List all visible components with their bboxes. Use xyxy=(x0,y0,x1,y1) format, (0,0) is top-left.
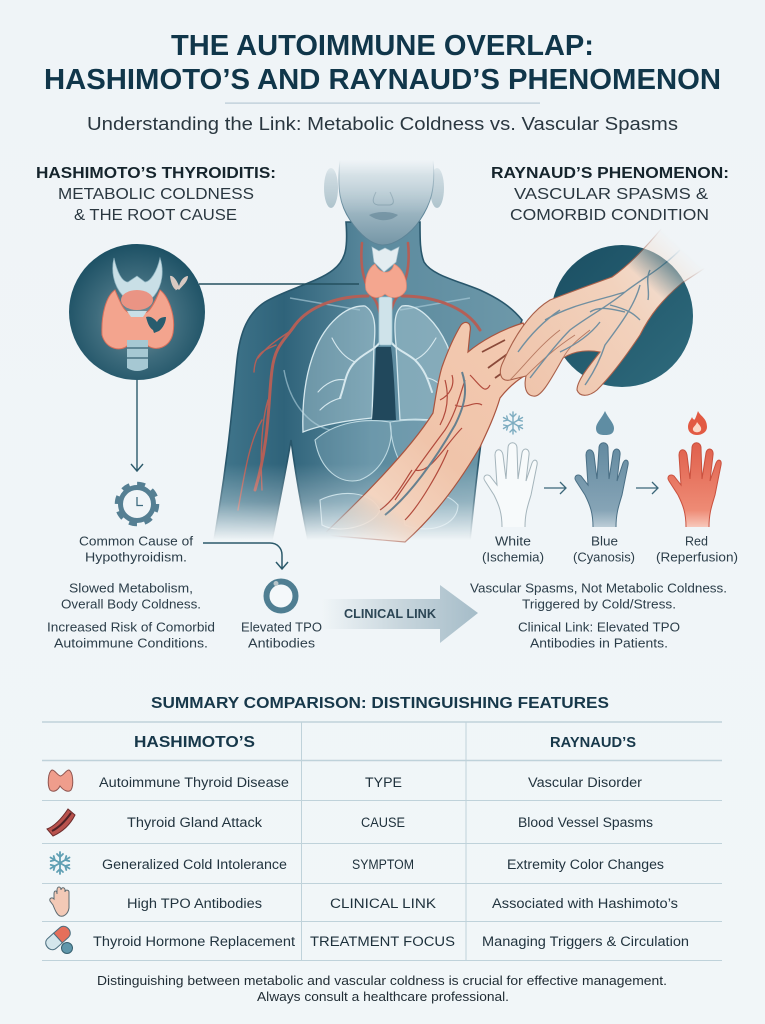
label: white: White xyxy=(495,534,531,548)
row: cause: CAUSE xyxy=(361,815,405,830)
hand: blue cyanosis xyxy=(575,443,628,527)
table header: RAYNAUD’S xyxy=(550,734,636,751)
row: cause xyxy=(127,815,653,830)
text: slowed metabolism: Overall Body Coldness. xyxy=(61,596,201,612)
table header xyxy=(134,734,636,751)
thyroid lobes xyxy=(102,290,174,349)
icon: flame xyxy=(688,411,707,435)
mediastinum xyxy=(372,347,396,420)
label: red: (Reperfusion) xyxy=(656,550,738,564)
title: HASHIMOTO’S AND RAYNAUD’S PHENOMENON xyxy=(44,64,721,96)
label: white xyxy=(482,534,544,564)
label: white: (Ischemia) xyxy=(482,550,544,564)
label: red xyxy=(656,534,738,564)
row: type: Vascular Disorder xyxy=(528,775,643,790)
teal butterfly xyxy=(146,317,166,333)
text: vascular spasms: Vascular Spasms, Not Metabolic Coldness. xyxy=(470,580,727,596)
text: elevated TPO: Elevated TPO xyxy=(241,620,322,634)
icon: gear clock xyxy=(117,484,157,524)
arrow: blue to red xyxy=(636,482,658,494)
title xyxy=(44,30,721,96)
row: clinical link: CLINICAL LINK xyxy=(330,896,436,911)
anatomical torso illustration xyxy=(214,160,522,540)
row: clinical link: High TPO Antibodies xyxy=(127,896,262,911)
label: red: Red xyxy=(685,534,708,548)
row: treatment focus xyxy=(93,934,689,949)
row: symptom: Extremity Color Changes xyxy=(507,857,664,872)
footer note: Always consult a healthcare professional. xyxy=(257,989,509,1004)
row: type: TYPE xyxy=(365,775,402,790)
arteries xyxy=(238,243,480,510)
text: clinical link: Clinical Link: Elevated TPO xyxy=(518,620,680,634)
footer note: Distinguishing between metabolic and vascular coldness is crucial for effective management. xyxy=(97,973,667,988)
text: comorbid risk xyxy=(47,620,215,650)
row: treatment focus: Thyroid Hormone Replacement xyxy=(93,934,295,949)
abdominal organs xyxy=(315,420,458,529)
row: symptom: Generalized Cold Intolerance xyxy=(102,857,287,872)
trachea rings xyxy=(127,340,148,371)
heading: Raynaud's phenomenon: VASCULAR SPASMS & xyxy=(514,186,708,203)
heading: Raynaud's phenomenon xyxy=(491,165,729,224)
lungs xyxy=(303,306,460,432)
row: cause: Thyroid Gland Attack xyxy=(127,815,262,830)
bronchi xyxy=(318,338,448,410)
icon: blood vessel xyxy=(47,809,75,836)
icon: snowflake xyxy=(504,412,522,434)
text: elevated TPO xyxy=(241,620,322,650)
heading: Hashimoto's thyroiditis: HASHIMOTO’S THYROIDITIS: xyxy=(36,165,276,182)
row: treatment focus: Managing Triggers & Circulation xyxy=(482,934,689,949)
text: common cause: Hypothyroidism. xyxy=(85,550,187,564)
label: blue xyxy=(573,534,635,564)
text: comorbid risk: Autoimmune Conditions. xyxy=(54,636,208,650)
heading: Hashimoto's thyroiditis xyxy=(36,165,276,224)
clinical link arrow xyxy=(322,585,478,643)
shoulder highlights xyxy=(284,298,470,430)
text: slowed metabolism: Slowed Metabolism, xyxy=(69,580,193,596)
clinical link arrow: CLINICAL LINK xyxy=(344,607,436,621)
icon: TPO antibody ring xyxy=(266,581,296,610)
table header: HASHIMOTO’S xyxy=(134,734,255,751)
finger separations xyxy=(510,330,590,380)
veins xyxy=(518,250,680,385)
label: blue: (Cyanosis) xyxy=(573,550,635,564)
heading: Hashimoto's thyroiditis: & THE ROOT CAUSE xyxy=(74,207,237,224)
icon: pill and tablet xyxy=(43,924,73,954)
summary heading: SUMMARY COMPARISON: DISTINGUISHING FEATURES xyxy=(151,695,609,712)
text: comorbid risk: Increased Risk of Comorbid xyxy=(47,620,215,634)
Raynaud circle xyxy=(551,245,693,387)
row: clinical link xyxy=(127,896,678,911)
text: common cause: Common Cause of xyxy=(79,534,193,548)
text: clinical link: Antibodies in Patients. xyxy=(530,636,668,650)
row: type: Autoimmune Thyroid Disease xyxy=(99,775,289,790)
larynx ring xyxy=(121,290,153,310)
text: elevated TPO: Antibodies xyxy=(248,636,316,650)
forearm with red arteries xyxy=(323,322,534,542)
row: cause: Blood Vessel Spasms xyxy=(518,815,653,830)
row: treatment focus: TREATMENT FOCUS xyxy=(310,934,455,949)
row: clinical link: Associated with Hashimoto’s xyxy=(492,896,678,911)
text: clinical link xyxy=(518,620,680,650)
subtitle: Understanding the Link: Metabolic Coldness vs. Vascular Spasms xyxy=(87,113,678,134)
icon: small snowflake xyxy=(50,852,70,874)
icon: water drop xyxy=(596,411,614,435)
torso silhouette xyxy=(214,222,522,540)
row: symptom: SYMPTOM xyxy=(352,857,414,872)
thyroid cartilage xyxy=(113,258,162,303)
text: common cause xyxy=(79,534,193,564)
heading: Hashimoto's thyroiditis: METABOLIC COLDNESS xyxy=(58,186,254,203)
row: symptom xyxy=(102,857,664,872)
title: THE AUTOIMMUNE OVERLAP: xyxy=(171,30,594,62)
larynx xyxy=(372,247,399,272)
callout line to thyroid xyxy=(199,283,359,285)
arrow: to TPO antibodies xyxy=(203,543,288,569)
heading: Raynaud's phenomenon: RAYNAUD’S PHENOMENON: xyxy=(491,165,729,182)
footer note xyxy=(97,973,667,1004)
icon: small thyroid xyxy=(48,770,73,791)
arrow: white to blue xyxy=(544,482,566,494)
row: type xyxy=(99,775,643,790)
pale butterfly xyxy=(170,276,188,291)
comparison table xyxy=(42,722,722,960)
hand: red reperfusion xyxy=(668,443,721,527)
label: blue: Blue xyxy=(591,534,618,548)
hand: white ischemia xyxy=(484,443,537,527)
thyroid gland xyxy=(365,264,406,297)
arrow: thyroid to gear xyxy=(131,380,143,471)
head xyxy=(324,160,444,245)
icon: small hand xyxy=(50,887,69,916)
text: vascular spasms: Triggered by Cold/Stress. xyxy=(522,596,676,612)
text: vascular spasms xyxy=(470,580,727,612)
hand with spasming veins xyxy=(500,228,705,396)
trachea xyxy=(379,297,392,345)
text: slowed metabolism xyxy=(61,580,201,612)
heading: Raynaud's phenomenon: COMORBID CONDITION xyxy=(510,207,709,224)
Hashimoto thyroid circle icon xyxy=(69,244,205,380)
